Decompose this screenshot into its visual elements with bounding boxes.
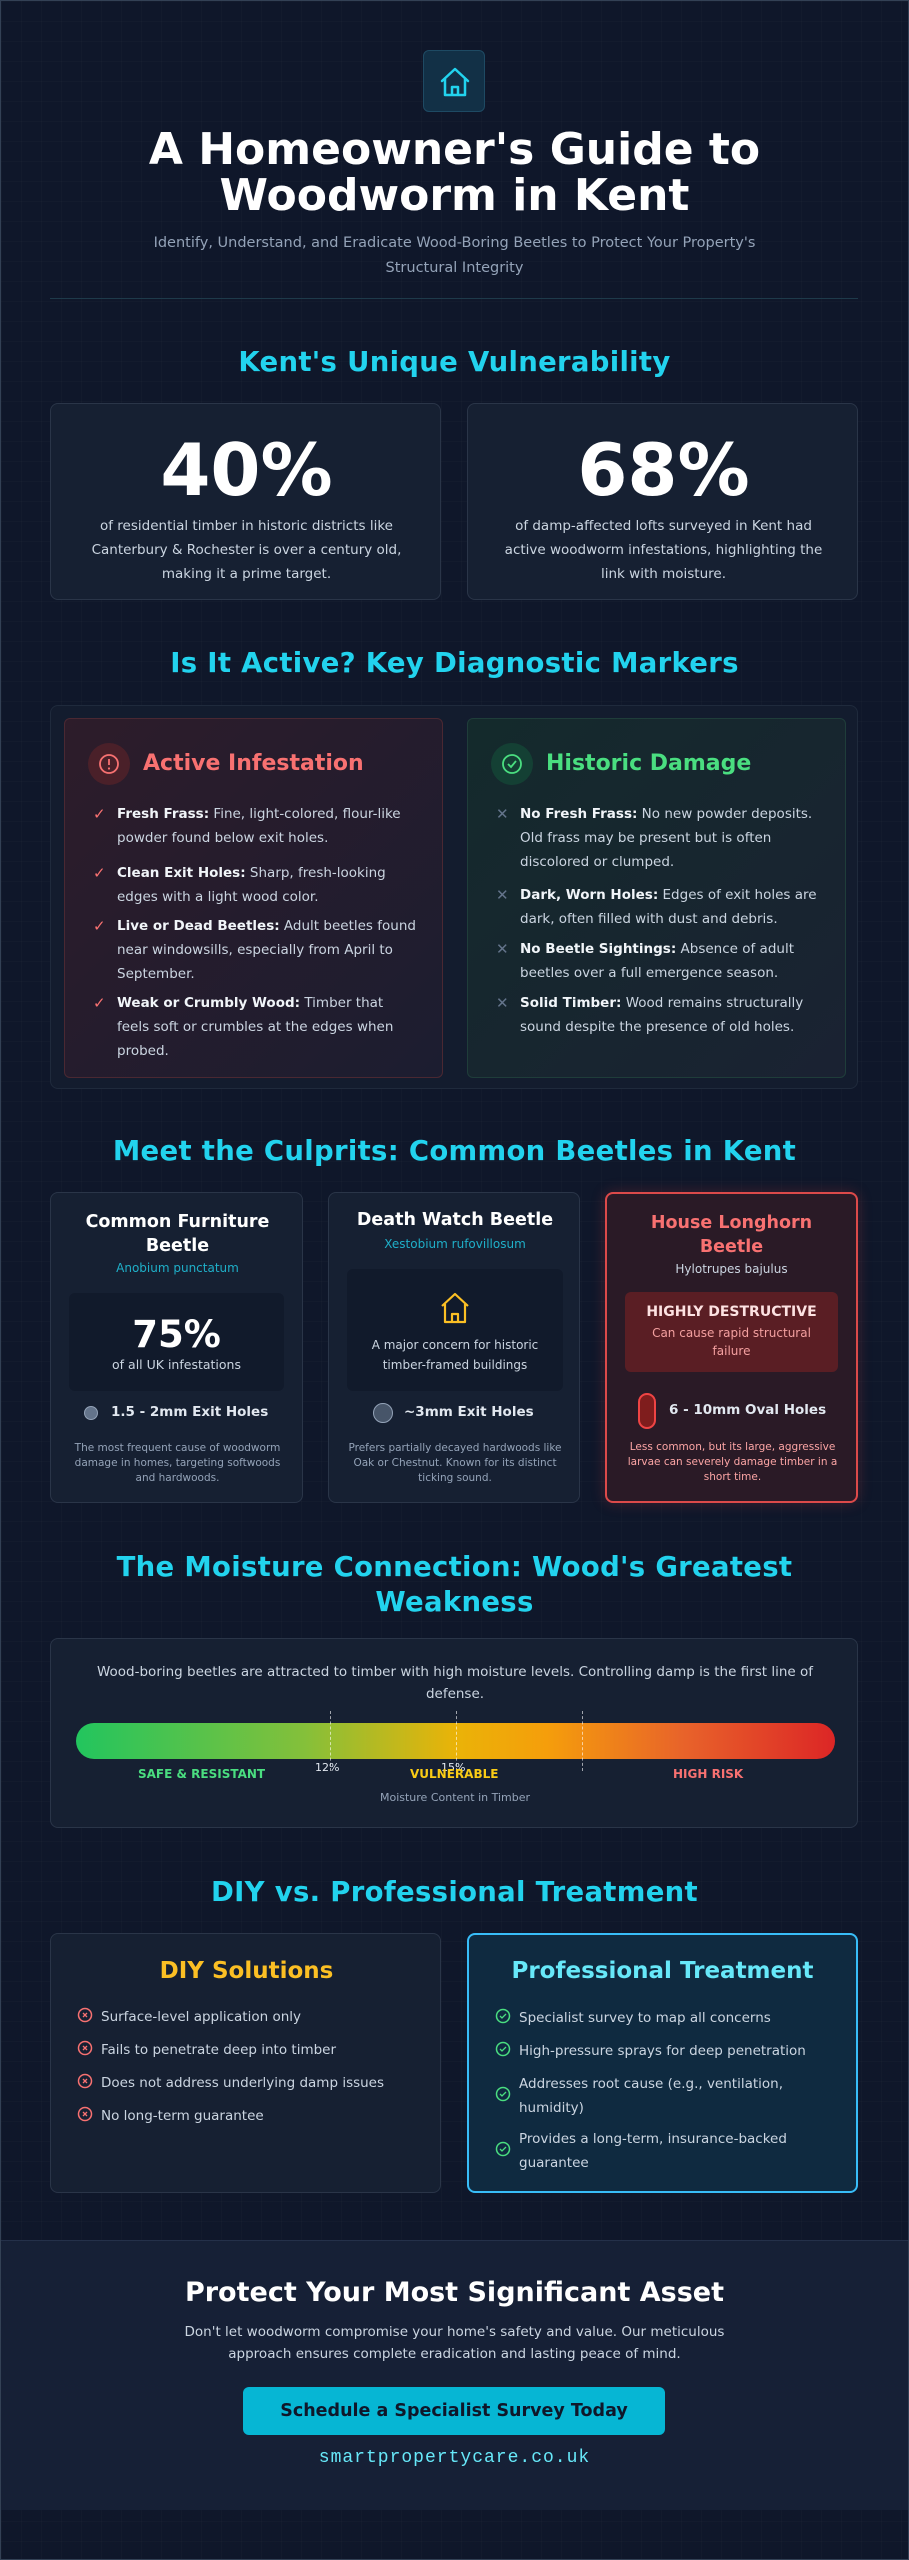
panel: historic damage: No Fresh Frass: No new powder deposits. Old frass may be present but is often discolored or clumped. [520, 806, 812, 870]
button [243, 2387, 665, 2435]
panel: DIY: DIY Solutions [160, 1958, 333, 1984]
title: A Homeowner's Guide to [149, 124, 760, 175]
card: house longhorn beetle: House Longhorn [651, 1213, 812, 1233]
panel: moisture chart [50, 1638, 858, 1828]
panel: active infestation: feels soft or crumbles at the edges when probed. [117, 1019, 393, 1059]
panel: historic damage: ✕ [496, 994, 509, 1012]
stat card 68%: 68% [577, 428, 750, 512]
panel: DIY: Does not address underlying damp issues [101, 2075, 384, 2091]
card: death watch beetle [328, 1192, 580, 1503]
icon: check [491, 743, 533, 785]
panel: DIY: Fails to penetrate deep into timber [101, 2042, 336, 2058]
panel: moisture chart: 15% [441, 1761, 465, 1774]
panel: moisture chart: 12% [315, 1761, 339, 1774]
panel: active infestation: ✓ [93, 864, 106, 882]
panel: active infestation: Live or Dead Beetles: Adult beetles found near windowsills, especially from April to September. [117, 918, 416, 982]
footer CTA: Don't let woodworm compromise your home's safety and value. Our meticulous approach ensures complete eradication and lasting peace of mind. [185, 2324, 724, 2362]
panel: historic damage: No Beetle Sightings: Absence of adult beetles over a full emergence season. [520, 941, 794, 981]
card: common furniture beetle: 75% [132, 1313, 221, 1356]
heading: DIY vs Professional: DIY vs. Professional Treatment [211, 1876, 698, 1908]
panel: active infestation: ✓ [93, 994, 106, 1012]
heading: moisture connection: Weakness [375, 1586, 534, 1618]
card: common furniture beetle: 1.5 - 2mm Exit Holes [111, 1404, 268, 1420]
panel: DIY: No long-term guarantee [101, 2108, 264, 2124]
panel: historic damage: ✕ [496, 886, 509, 904]
panel: active infestation: ✓ [93, 917, 106, 935]
icon: house gold [441, 1292, 469, 1324]
panel: moisture chart: Moisture Content in Timber [380, 1791, 530, 1804]
card: house longhorn beetle: HIGHLY DESTRUCTIVE [646, 1304, 817, 1320]
panel: active infestation: Fresh Frass: Fine, light-colored, flour-like powder found below exit holes. [117, 806, 401, 846]
panel: historic damage: ✕ [496, 940, 509, 958]
card: house longhorn beetle: Hylotrupes bajulus [675, 1262, 788, 1276]
card: common furniture beetle: The most frequent cause of woodworm damage in homes, targeting softwoods and hardwoods. [75, 1442, 280, 1484]
card: house longhorn beetle: 6 - 10mm Oval Holes [669, 1402, 826, 1418]
footer CTA: smartpropertycare.co.uk [319, 2448, 590, 2468]
stat card 40% [50, 403, 441, 600]
panel: active infestation [64, 718, 443, 1078]
bar chart: moisture gradient [76, 1723, 835, 1759]
panel: historic damage: ✕ [496, 805, 509, 823]
icon: alert [88, 743, 130, 785]
icon: house [423, 50, 485, 112]
card: death watch beetle: Prefers partially decayed hardwoods like Oak or Chestnut. Known for its distinct ticking sound. [348, 1442, 562, 1484]
panel: moisture chart: SAFE & RESISTANT [138, 1767, 265, 1781]
heading: Kent's Unique Vulnerability: Kent's Unique Vulnerability [238, 346, 671, 378]
stat card 68%: of damp-affected lofts surveyed in Kent had active woodworm infestations, highlighting the link with moisture. [505, 518, 822, 582]
subtitle: Identify, Understand, and Eradicate Wood-Boring Beetles to Protect Your Property's Structural Integrity [154, 235, 755, 276]
panel: moisture chart: VULNERABLE [410, 1767, 498, 1781]
heading: moisture connection [116, 1551, 792, 1618]
card: common furniture beetle: Beetle [146, 1236, 209, 1256]
heading: culprits: Meet the Culprits: Common Beetles in Kent [113, 1135, 796, 1167]
heading: moisture connection: The Moisture Connection: Wood's Greatest [117, 1551, 792, 1583]
panel: professional: Provides a long-term, insurance-backed guarantee [519, 2131, 787, 2171]
card: house longhorn beetle: Less common, but its large, aggressive larvae can severely damage timber in a short time. [628, 1441, 837, 1483]
stat card 40%: of residential timber in historic districts like Canterbury & Rochester is over a century old, making it a prime target. [92, 518, 401, 582]
panel: historic damage: Dark, Worn Holes: Edges of exit holes are dark, often filled with dust and debris. [520, 887, 817, 927]
stat card 40%: 40% [160, 428, 333, 512]
panel: professional: Specialist survey to map all concerns [519, 2010, 771, 2026]
panel: historic damage [467, 718, 846, 1078]
card: death watch beetle: Death Watch Beetle [357, 1210, 553, 1230]
panel: historic damage: Historic Damage [546, 751, 751, 776]
panel: moisture chart: HIGH RISK [673, 1767, 743, 1781]
heading: diagnostic markers: Is It Active? Key Diagnostic Markers [170, 647, 739, 679]
panel: active infestation: Weak or Crumbly Wood: Timber that [117, 995, 383, 1011]
card: death watch beetle: A major concern for historic timber-framed buildings [372, 1338, 538, 1372]
title: Woodworm in Kent [220, 170, 689, 221]
card: death watch beetle: ~3mm Exit Holes [404, 1404, 534, 1420]
panel: professional: High-pressure sprays for deep penetration [519, 2043, 806, 2059]
panel: DIY: Surface-level application only [101, 2009, 301, 2025]
card: house longhorn beetle: Can cause rapid structural failure [652, 1326, 811, 1358]
panel: professional [467, 1933, 858, 2193]
card: common furniture beetle: Anobium punctatum [116, 1261, 239, 1275]
panel: moisture chart: Wood-boring beetles are attracted to timber with high moisture levels. Controlling damp is the first line of defense. [97, 1664, 813, 1702]
panel: historic damage: Solid Timber: Wood remains structurally sound despite the presence of old holes. [520, 995, 803, 1035]
panel: active infestation: Clean Exit Holes: Sharp, fresh-looking edges with a light wood color. [117, 865, 386, 905]
card: house longhorn beetle [605, 1192, 858, 1503]
panel: active infestation: ✓ [93, 805, 106, 823]
panel: active infestation: Active Infestation [143, 751, 364, 776]
footer CTA [1, 2240, 908, 2510]
panel: professional: Addresses root cause (e.g., ventilation, humidity) [519, 2076, 783, 2116]
panel: diagnostic [50, 705, 858, 1089]
card: common furniture beetle: of all UK infestations [112, 1357, 241, 1372]
button: Schedule a Specialist Survey Today [280, 2401, 628, 2421]
card: death watch beetle: Xestobium rufovillosum [384, 1237, 526, 1251]
card: house longhorn beetle: Beetle [700, 1237, 763, 1257]
panel: professional: Professional Treatment [511, 1958, 814, 1984]
card: common furniture beetle [50, 1192, 303, 1503]
panel: DIY [50, 1933, 441, 2193]
stat card 68% [467, 403, 858, 600]
title [149, 124, 760, 221]
card: common furniture beetle: Common Furniture [86, 1212, 269, 1232]
footer CTA: Protect Your Most Significant Asset [185, 2277, 724, 2308]
